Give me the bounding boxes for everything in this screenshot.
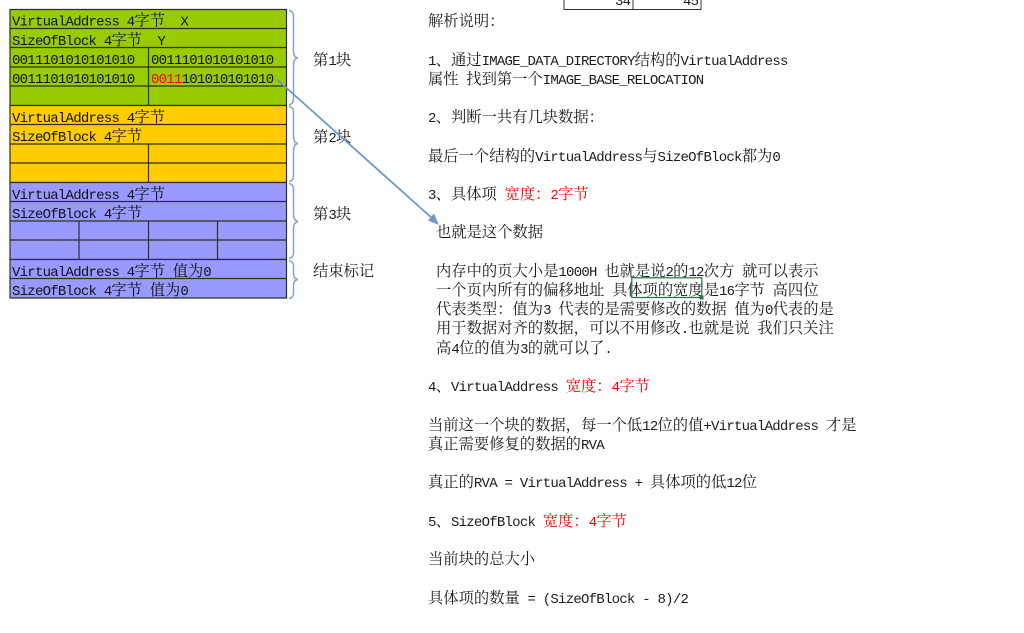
text block: step 4 (428, 377, 856, 492)
text block: step 3: 代表类型：值为3 代表的是需要修改的数据 值为0代表的是 (436, 300, 834, 319)
panel: block 2: VirtualAddress 4字节 (12, 108, 165, 127)
panel: block 2 (10, 106, 286, 182)
label: block 3: 第3块 (313, 206, 351, 224)
label: block 1: 第1块 (313, 52, 351, 70)
text block: step 5: 当前块的总大小 (428, 551, 536, 568)
brace: block 2 (289, 106, 298, 182)
panel: end marker (10, 260, 286, 300)
panel: block 2: SizeOfBlock 4字节 (12, 127, 142, 146)
label: block 2: 第2块 (313, 129, 351, 147)
text block: step 4: 当前这一个块的数据，每一个低12位的值+VirtualAddress 才是 (428, 416, 856, 435)
arrow: from item to explanation (277, 80, 439, 225)
selection box (632, 278, 704, 300)
text block: step 3: 用于数据对齐的数据，可以不用修改.也就是说 我们只关注 (436, 319, 834, 338)
text block: step 5: 具体项的数量 = (SizeOfBlock - 8)/2 (428, 590, 688, 608)
text block: step 4: 4、VirtualAddress 宽度：4字节 (428, 377, 650, 396)
panel: block 1: SizeOfBlock 4字节 Y (12, 31, 166, 50)
table fragment at top (564, 0, 701, 10)
text block: step 5: 5、SizeOfBlock 宽度：4字节 (428, 512, 627, 531)
panel: end marker: SizeOfBlock 4字节 值为0 (12, 281, 188, 300)
text block: step 2: 最后一个结构的VirtualAddress与SizeOfBlock都为0 (428, 147, 780, 166)
text block: step 4: 真正的RVA = VirtualAddress + 具体项的低12位 (428, 473, 757, 492)
panel: block 1: 0011101010101010 (12, 72, 135, 88)
panel: block 1: VirtualAddress 4字节 X (12, 12, 189, 30)
panel: block 1: 0011101010101010 (12, 53, 135, 69)
text block: step 2: 2、判断一共有几块数据： (428, 108, 604, 127)
text block: step 1: 1、通过IMAGE_DATA_DIRECTORY结构的VirtualAddress (428, 51, 788, 70)
text block: step 1: 属性 找到第一个IMAGE_BASE_RELOCATION (428, 71, 704, 89)
text block: step 5 (428, 512, 688, 608)
text block: step 1 (428, 51, 788, 89)
panel: end marker: VirtualAddress 4字节 值为0 (12, 262, 211, 281)
text block: step 3: 也就是这个数据 (436, 223, 543, 241)
panel: block 1 (10, 10, 286, 106)
brace: end marker (289, 261, 298, 298)
panel: block 3 (10, 182, 286, 260)
brace: block 1 (289, 10, 298, 105)
panel: block 1: 0011101010101010 (151, 53, 274, 69)
panel: block 3: VirtualAddress 4字节 (12, 185, 165, 204)
label: end marker: 结束标记 (313, 263, 374, 280)
panel: block 1: 0011101010101010 (151, 72, 274, 88)
text block: heading: 解析说明： (428, 13, 504, 30)
text block: step 3: 内存中的页大小是1000H 也就是说2的12次方 就可以表示 (436, 262, 819, 281)
text block: step 3: 一个页内所有的偏移地址 具体项的宽度是16字节 高四位 (436, 281, 819, 300)
panel: block 3: SizeOfBlock 4字节 (12, 204, 142, 223)
text block: step 3 (428, 185, 834, 358)
text block: step 3: 3、具体项 宽度：2字节 (428, 185, 589, 204)
text block: step 3: 高4位的值为3的就可以了. (436, 339, 612, 358)
brace: block 3 (289, 184, 298, 258)
text block: step 4: 真正需要修复的数据的RVA (428, 435, 605, 454)
text block: step 2 (428, 108, 780, 166)
